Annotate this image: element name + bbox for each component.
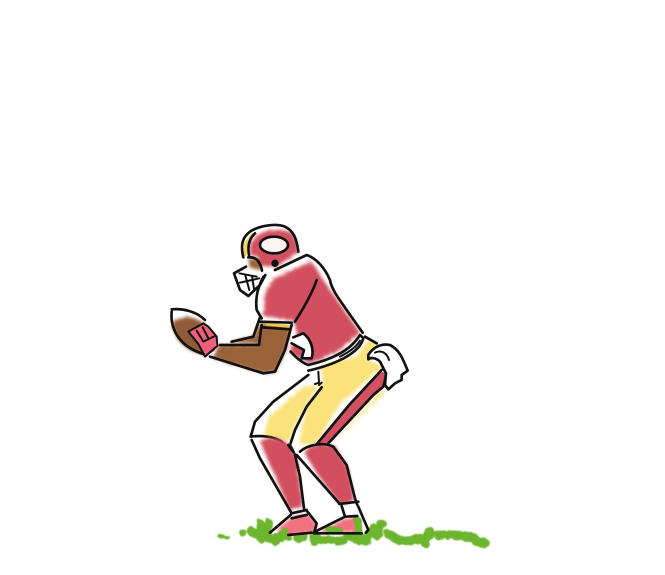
pants colour — [264, 339, 385, 445]
glove outline — [188, 323, 217, 357]
glove — [189, 325, 216, 355]
pants outlines — [251, 337, 387, 455]
towel — [368, 345, 408, 389]
upper body — [171, 225, 363, 373]
legs and shoes — [252, 438, 368, 541]
helmet outline — [242, 225, 298, 257]
leg colour — [260, 438, 361, 535]
grass — [219, 521, 485, 543]
hand at waist — [292, 333, 313, 358]
arm — [232, 317, 260, 342]
face mask — [234, 267, 265, 296]
football — [172, 309, 205, 320]
colour fills — [173, 230, 360, 373]
pants — [251, 337, 408, 455]
jersey — [275, 255, 363, 333]
sleeve stripe — [266, 324, 291, 327]
grass over shoes — [275, 520, 359, 541]
helmet logo — [260, 237, 288, 253]
helmet stripe — [245, 234, 253, 256]
outlines — [171, 225, 363, 373]
red stripe — [316, 371, 386, 444]
leg outlines — [252, 440, 368, 535]
waistband — [291, 335, 363, 371]
